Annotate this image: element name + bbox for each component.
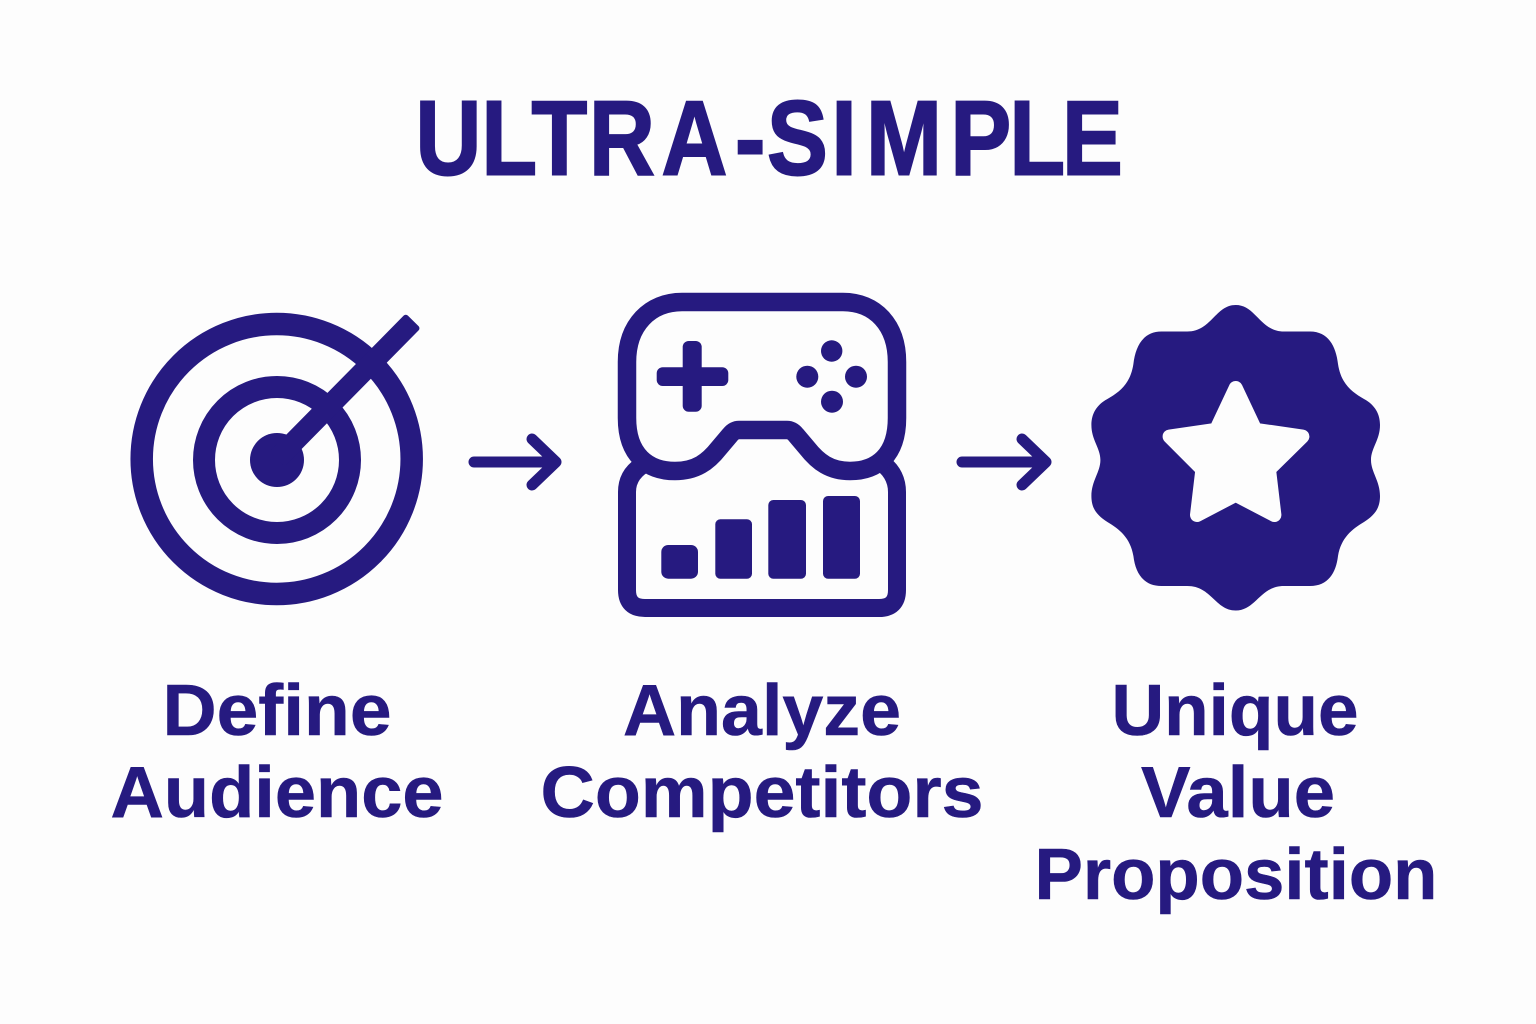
arrow: first xyxy=(474,439,556,485)
label: Analyze Competitors xyxy=(540,671,984,833)
icon: plus xyxy=(657,341,728,412)
label: Analyze Competitors: Competitors xyxy=(540,753,984,833)
icon: target xyxy=(142,313,421,594)
icon: badge with star xyxy=(1091,305,1380,610)
label: Unique Value Proposition xyxy=(1034,671,1438,915)
label: Define Audience: Define xyxy=(162,671,392,751)
label: Unique Value Proposition: Value xyxy=(1141,753,1335,833)
label: Unique Value Proposition: Unique xyxy=(1112,671,1358,751)
label: Define Audience: Audience xyxy=(110,753,443,833)
bar chart xyxy=(661,496,860,579)
arrow: second xyxy=(962,439,1046,485)
label: Define Audience xyxy=(110,671,443,833)
label: Analyze Competitors: Analyze xyxy=(623,671,901,751)
icon: buttons xyxy=(796,340,867,413)
title: ULTRA-SIMPLE xyxy=(415,79,1123,197)
label: Unique Value Proposition: Proposition xyxy=(1034,835,1438,915)
icon: game controller with bar chart xyxy=(627,302,897,608)
